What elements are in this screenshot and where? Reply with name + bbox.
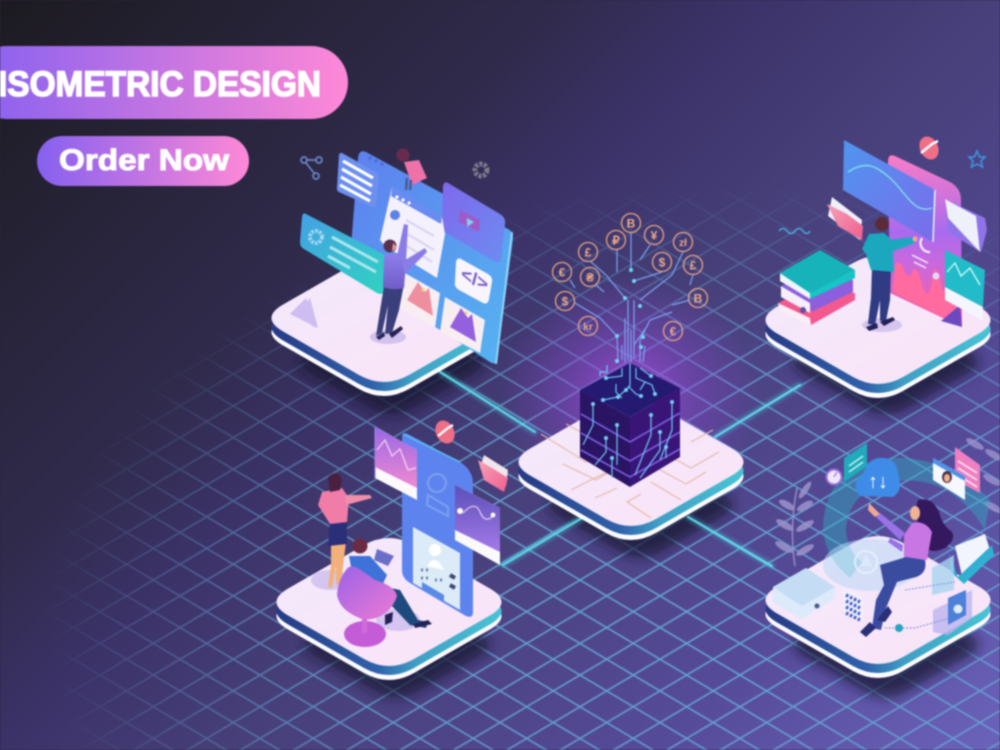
figure: person climbing panel (370, 224, 427, 344)
currency coins (552, 214, 708, 340)
coin symbols: kr (583, 322, 593, 333)
figure: seated man (349, 538, 432, 631)
cube circuits (583, 363, 672, 478)
book pink (778, 287, 855, 326)
coin symbols: £ (690, 258, 697, 272)
cube glow (500, 275, 760, 515)
coin symbols (559, 216, 703, 338)
circuit traces (541, 414, 719, 518)
cloud with arrows (855, 458, 900, 497)
figure: seated woman (860, 499, 953, 637)
book teal (780, 250, 855, 299)
teal chart card (945, 250, 985, 320)
data stem nodes (615, 268, 645, 363)
cube (580, 363, 680, 487)
figure: standing woman (311, 473, 372, 590)
coin symbols: B (627, 216, 636, 230)
platform: bottom right (766, 536, 990, 678)
platform: bottom left (276, 538, 502, 680)
coin symbols: zł (679, 238, 687, 249)
phone pink (888, 155, 962, 327)
platform: top left (272, 254, 496, 396)
coin symbols: B (694, 292, 703, 306)
books (778, 250, 855, 326)
figure: person on top (396, 148, 427, 190)
teal card (844, 443, 867, 482)
phone (402, 433, 473, 617)
calculator (843, 587, 863, 622)
icon: folder (478, 455, 508, 492)
blue chart card (843, 140, 935, 242)
icon: pill check (916, 133, 942, 163)
scene: analytics and books (778, 133, 987, 332)
video card (442, 182, 505, 263)
teal settings card (300, 213, 389, 294)
data dots (885, 582, 955, 632)
printer (773, 568, 835, 619)
holographic plate (823, 539, 919, 591)
coin symbols: £ (585, 246, 592, 260)
connector lines (440, 372, 800, 566)
title pill (0, 46, 348, 119)
plant right (965, 436, 1000, 515)
coin symbols: ₽ (612, 234, 620, 248)
chart drips (893, 262, 958, 325)
cube bands (581, 413, 680, 477)
icon: chair (337, 566, 397, 647)
scene: web design panels (300, 148, 513, 364)
profile card (933, 458, 965, 500)
book purple (781, 270, 853, 313)
figure: man in teal (862, 217, 918, 332)
doc pink (955, 447, 980, 493)
coin symbols: $ (562, 294, 569, 308)
floor grid (72, 209, 1000, 750)
map card (455, 485, 500, 565)
button text: Order Now (59, 144, 230, 177)
scene: mobile app team (311, 417, 508, 647)
order now button (37, 136, 249, 186)
image card purple (440, 297, 485, 353)
icon: gear (475, 164, 487, 176)
platform: top right (766, 256, 990, 398)
data stems (570, 233, 693, 362)
platform: centre (518, 398, 744, 540)
icon: mountain on floor (290, 298, 318, 328)
title text: ISOMETRIC DESIGN (0, 65, 321, 104)
ring widget (920, 238, 930, 252)
window bar (368, 156, 384, 166)
image card pink (398, 272, 440, 328)
coin symbols: $ (659, 256, 666, 270)
panel lip (496, 232, 512, 364)
white page (380, 187, 445, 278)
holographic ring (823, 458, 990, 578)
squiggle (779, 228, 810, 234)
cloud with arrows: ↑↓ (868, 471, 888, 493)
coin symbols: ¥ (651, 228, 658, 242)
folder teal (949, 534, 994, 584)
scene: virtual interface woman (773, 436, 1000, 637)
icon: share (301, 157, 322, 179)
passport and tiles (932, 555, 972, 635)
icon: pill check (432, 417, 458, 447)
chart card (375, 427, 417, 500)
scene: centre cube and coins (552, 214, 708, 487)
icon: clock (826, 470, 842, 484)
folder right (945, 199, 987, 252)
striped card (337, 153, 379, 208)
icon: star (969, 151, 985, 167)
code card (455, 258, 492, 304)
folder left (827, 197, 863, 240)
coin symbols: € (559, 266, 566, 280)
code card: </> (461, 263, 488, 295)
main blue panel (349, 151, 513, 363)
coin symbols: ₴ (586, 270, 594, 284)
coin symbols: € (670, 324, 677, 338)
platform shadows (300, 310, 978, 697)
plant left (774, 480, 815, 566)
